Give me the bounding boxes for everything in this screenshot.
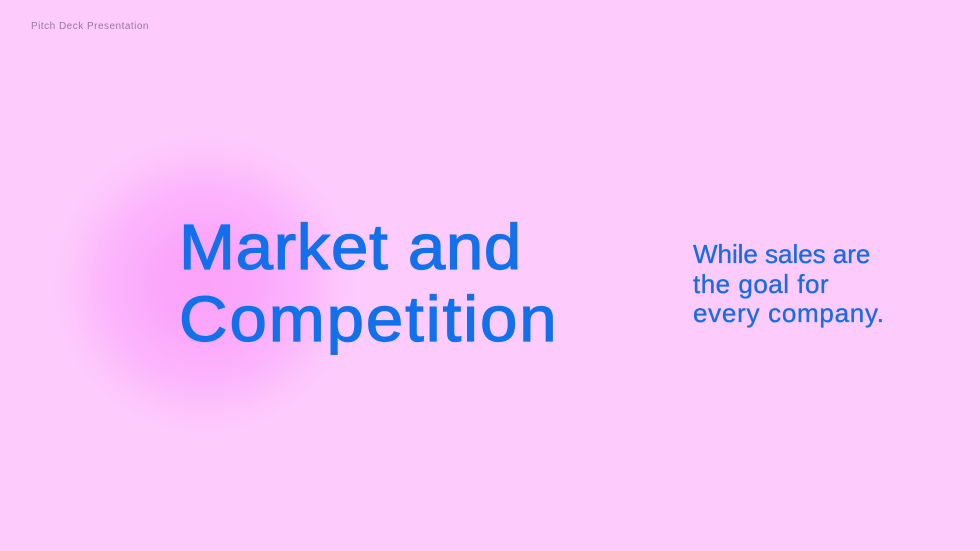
title: Market and	[179, 211, 522, 283]
subtitle text: While sales are	[693, 239, 870, 269]
background glow	[50, 132, 360, 437]
subtitle text: the goal for	[693, 268, 829, 298]
title: Competition	[179, 283, 559, 355]
header label: Pitch Deck Presentation	[31, 21, 149, 32]
title	[179, 211, 559, 355]
subtitle text	[692, 239, 885, 328]
subtitle text: every company.	[693, 298, 885, 328]
